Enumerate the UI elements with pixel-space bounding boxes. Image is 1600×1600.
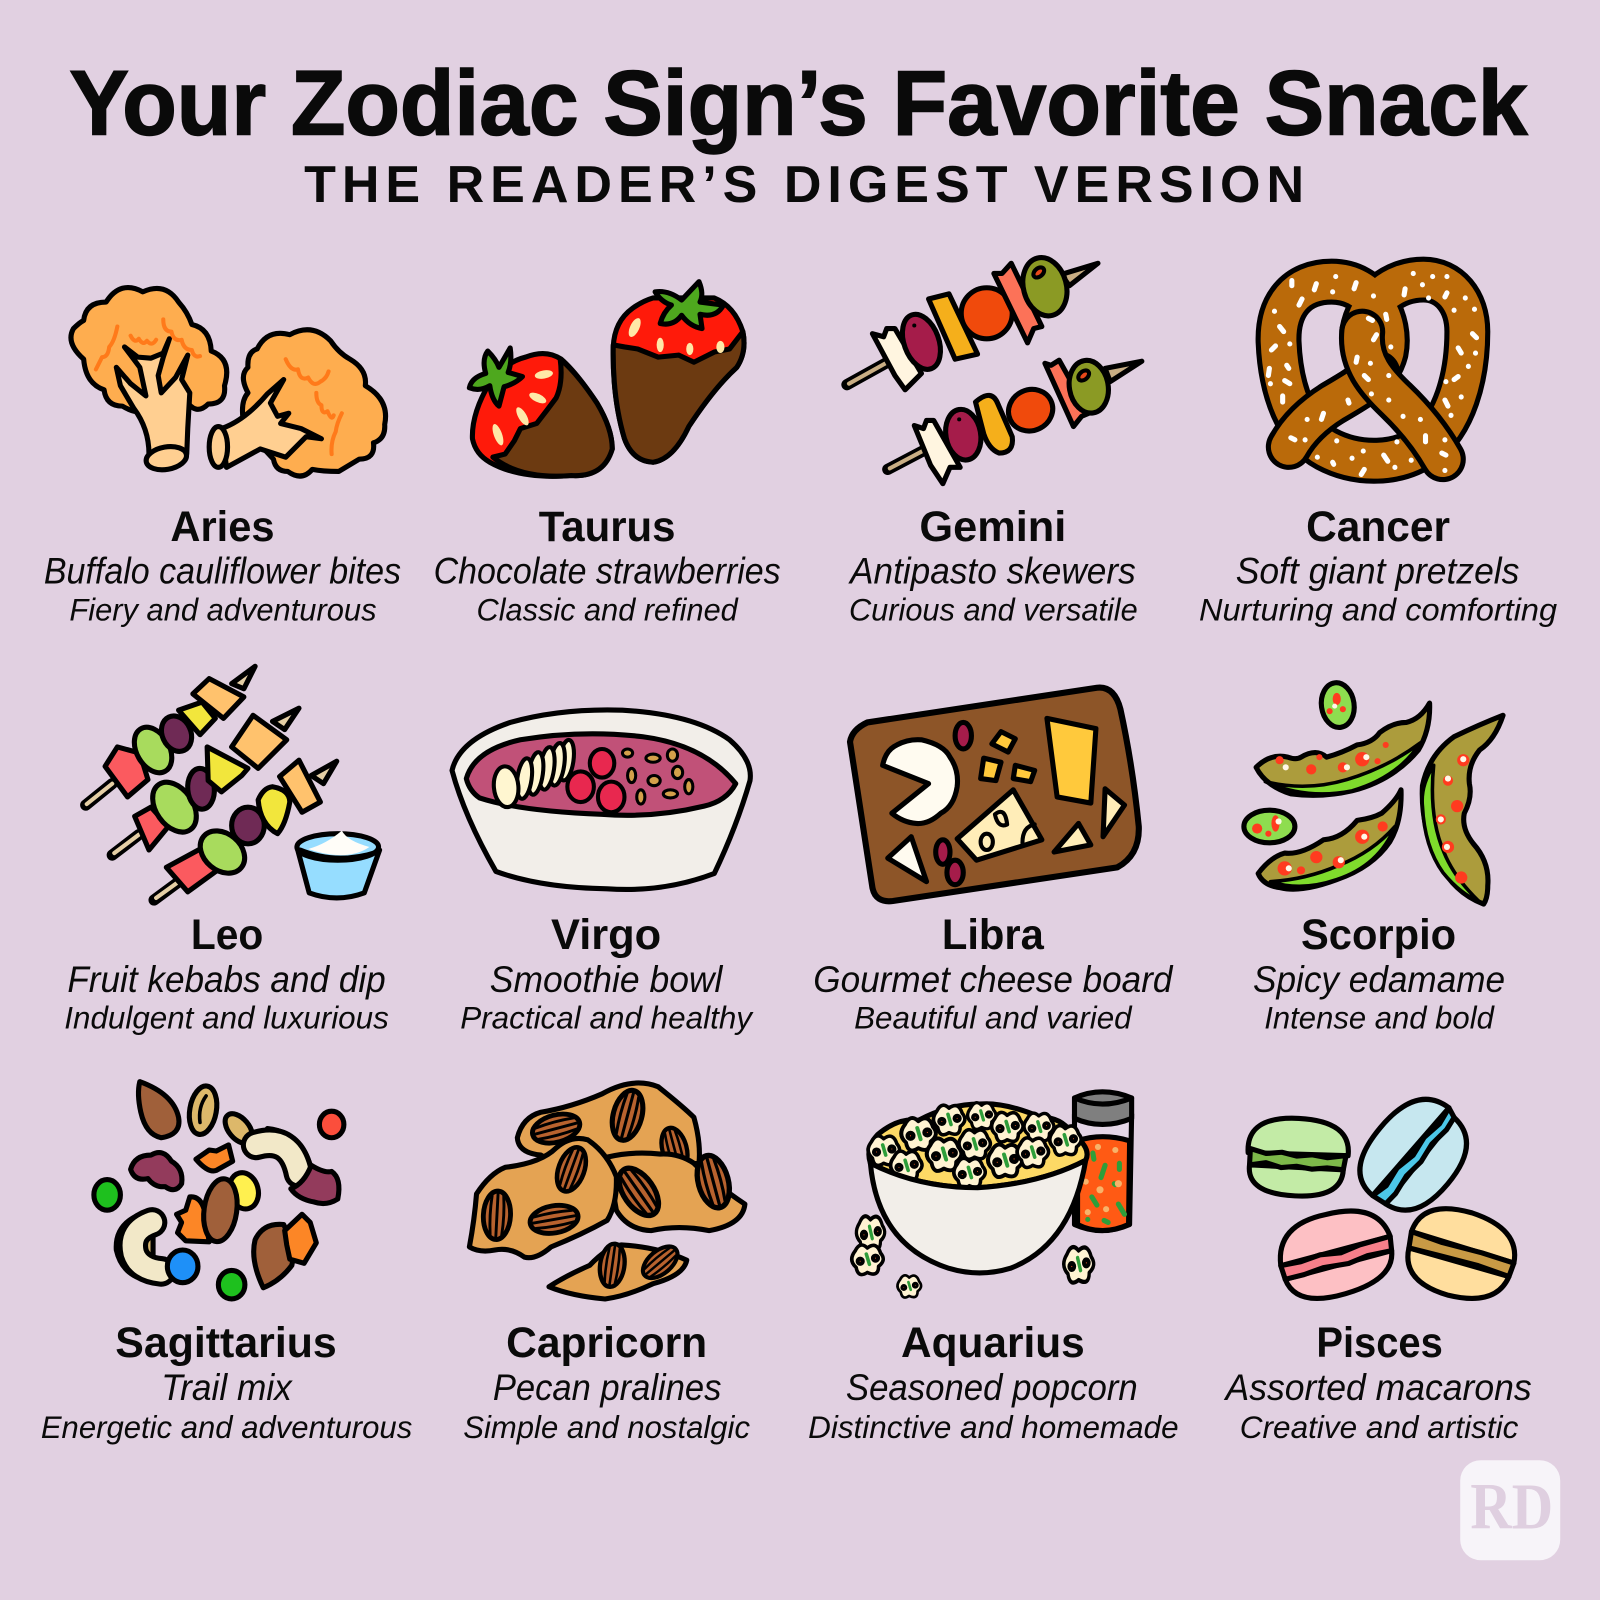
label: Libra <box>813 911 1174 1036</box>
label: Leo: Indulgent and luxurious <box>64 1000 389 1036</box>
label: Aries: Fiery and adventurous <box>69 591 377 627</box>
label: Libra: Beautiful and varied <box>854 1000 1133 1036</box>
label: Pisces: Creative and artistic <box>1240 1409 1519 1445</box>
panel: Leo <box>64 666 389 1036</box>
label: Virgo: Practical and healthy <box>460 1000 754 1036</box>
panel: Taurus <box>434 282 781 627</box>
label: Gemini: Antipasto skewers <box>848 551 1136 592</box>
icon: buffalo cauliflower <box>71 288 386 476</box>
logo: RD: RD <box>1470 1472 1553 1544</box>
icon: fruit kebabs and dip <box>86 666 380 900</box>
label: Aquarius <box>808 1319 1179 1445</box>
label: Scorpio <box>1253 911 1505 1036</box>
label: Aquarius: Aquarius <box>901 1319 1085 1367</box>
label: Aquarius: Seasoned popcorn <box>846 1367 1138 1408</box>
label: Taurus: Taurus <box>539 503 676 551</box>
label: Aries: Buffalo cauliflower bites <box>44 551 401 592</box>
label: Aries <box>44 503 401 627</box>
icon: cheese board <box>850 688 1139 901</box>
label: Cancer <box>1199 503 1558 627</box>
label: Libra: Gourmet cheese board <box>813 959 1174 1000</box>
label: Scorpio: Spicy edamame <box>1253 959 1505 1000</box>
icon: smoothie bowl <box>452 710 750 889</box>
icon: macarons <box>1246 1082 1524 1310</box>
label: Leo <box>64 911 389 1036</box>
label: Leo: Leo <box>191 911 263 959</box>
label: Cancer: Nurturing and comforting <box>1199 591 1558 627</box>
panel: Capricorn <box>463 1083 750 1445</box>
icon: soft pretzel <box>1268 273 1477 474</box>
label: Cancer: Cancer <box>1306 503 1450 551</box>
label: Capricorn: Capricorn <box>506 1319 707 1367</box>
label: Capricorn <box>463 1319 750 1445</box>
panel: Gemini <box>847 253 1142 627</box>
panel: Virgo <box>452 710 754 1036</box>
panel: Aries <box>44 288 401 627</box>
panel: Libra <box>813 688 1174 1036</box>
label: Pisces: Pisces <box>1316 1319 1443 1367</box>
label: Virgo: Virgo <box>551 911 661 959</box>
panel: Sagittarius <box>41 1082 412 1445</box>
label: Pisces: Assorted macarons <box>1224 1367 1532 1408</box>
label: Sagittarius <box>41 1319 412 1445</box>
icon: pecan pralines <box>469 1083 745 1299</box>
label: Cancer: Soft giant pretzels <box>1236 551 1519 592</box>
panel: Cancer <box>1199 273 1558 627</box>
icon: chocolate strawberries <box>469 282 744 476</box>
label: Scorpio: Intense and bold <box>1264 1000 1495 1036</box>
logo: RD <box>1460 1460 1560 1560</box>
panel: Pisces <box>1224 1082 1532 1445</box>
label: Virgo <box>460 911 754 1036</box>
label: Sagittarius: Sagittarius <box>115 1319 337 1367</box>
label: Taurus: Chocolate strawberries <box>434 551 781 592</box>
icon: spicy edamame <box>1244 681 1503 904</box>
label: Leo: Fruit kebabs and dip <box>67 959 386 1000</box>
label: Aquarius: Distinctive and homemade <box>808 1409 1179 1445</box>
label: Capricorn: Pecan pralines <box>493 1367 721 1408</box>
label: Pisces <box>1224 1319 1532 1445</box>
panel: Aquarius <box>808 1092 1179 1445</box>
icon: trail mix <box>94 1082 344 1299</box>
subtitle: THE READER’S DIGEST VERSION <box>304 156 1304 214</box>
panel: Scorpio <box>1244 681 1505 1036</box>
label: Taurus <box>434 503 781 627</box>
label: Aries: Aries <box>170 503 274 551</box>
icon: seasoned popcorn <box>852 1092 1132 1298</box>
label: Capricorn: Simple and nostalgic <box>463 1409 750 1445</box>
icon: antipasto skewers <box>847 253 1142 484</box>
title: Your Zodiac Sign’s Favorite Snack <box>69 53 1528 155</box>
label: Sagittarius: Energetic and adventurous <box>41 1409 412 1445</box>
label: Virgo: Smoothie bowl <box>490 959 723 1000</box>
label: Libra: Libra <box>942 911 1045 959</box>
label: Taurus: Classic and refined <box>477 591 739 627</box>
label: Scorpio: Scorpio <box>1301 911 1456 959</box>
label: Gemini <box>848 503 1138 627</box>
label: Gemini: Curious and versatile <box>849 591 1138 627</box>
label: Sagittarius: Trail mix <box>161 1367 293 1408</box>
label: Gemini: Gemini <box>919 503 1066 551</box>
